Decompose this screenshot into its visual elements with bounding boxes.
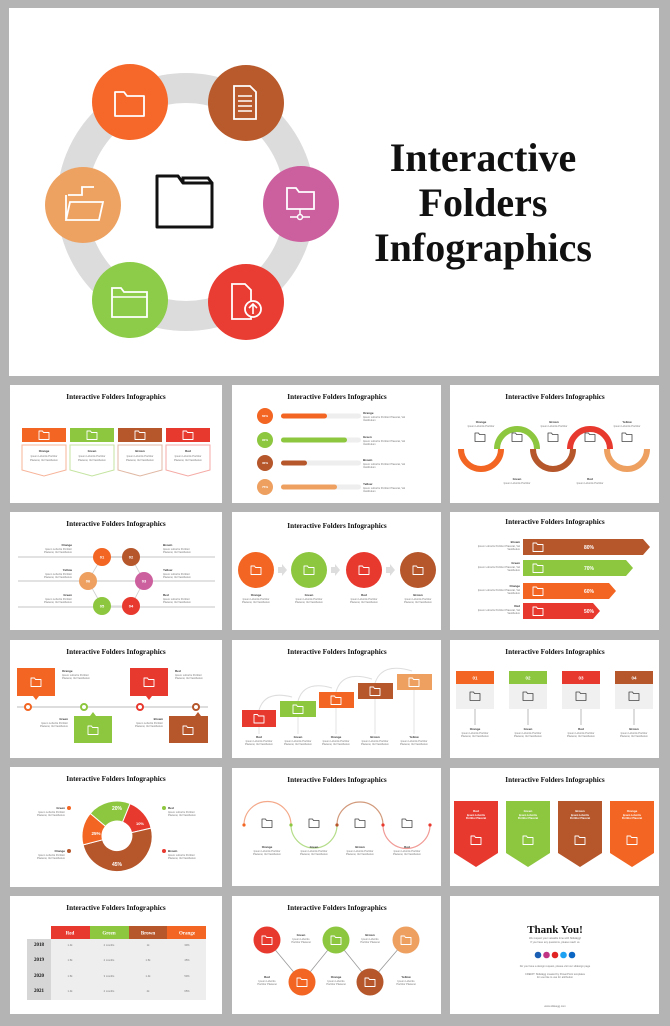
panel: slide 6 arrow bars: 50%: [584, 609, 595, 615]
panel: slide 9 numbered cards: Ipsum Lobortis Porttitor: [568, 731, 595, 735]
panel: slide 5 process circles: Ipsum Lobortis Porttitor: [243, 597, 270, 601]
panel: slide 5 process circles: Ipsum Lobortis Porttitor: [405, 597, 432, 601]
panel: slide 1 tabs: Interactive Folders Infographics: [66, 393, 166, 401]
panel: slide 1 tabs: Brown: [135, 449, 145, 453]
panel: slide 11 wavy line: Orange: [262, 845, 273, 849]
panel: slide 7 timeline callouts: Ipsum Lobortis Porttitor: [62, 673, 89, 677]
panel: slide 2 progress bars: 75%: [262, 485, 268, 489]
panel: slide 9 numbered cards: Brown: [629, 727, 639, 731]
panel: slide 7 timeline callouts: Placerat, Vel Vestibulum: [135, 724, 163, 728]
panel: slide 13 table: 65%: [184, 989, 190, 993]
panel: slide 13 table: 1.4k: [146, 974, 151, 978]
panel: slide 8 staircase: [232, 640, 441, 758]
panel: slide 3 wave: Green: [513, 477, 522, 481]
panel: slide 10 donut chart: Ipsum Lobortis Porttitor: [168, 853, 195, 857]
icon: brown document circle: [208, 65, 284, 141]
panel: slide 10 donut chart: Ipsum Lobortis Porttitor: [168, 810, 195, 814]
panel: slide 1 tabs: Placerat, Vel Vestibulum: [126, 458, 154, 462]
panel: slide 14 zigzag circles: [232, 896, 441, 1014]
panel: slide 14 zigzag circles: Brown: [365, 933, 375, 937]
panel: slide 8 staircase: Ipsum Lobortis Porttitor: [246, 739, 273, 743]
panel: slide 5 process circles: Placerat, Vel Vestibulum: [404, 600, 432, 604]
panel: slide 11 wavy line: Interactive Folders Infographics: [287, 776, 387, 784]
panel: slide 15 thank you: Thank You!: [527, 924, 583, 936]
panel: slide 12 banners: Porttitor Placerat: [622, 817, 642, 820]
panel: slide 12 banners: Orange: [627, 809, 638, 813]
panel: slide 4 hexagon: Green: [63, 593, 72, 597]
panel: slide 8 staircase: Placerat, Vel Vestibulum: [361, 742, 389, 746]
panel: slide 13 table: 50%: [184, 974, 190, 978]
panel: slide 1 tabs: Ipsum Lobortis Porttitor: [175, 454, 202, 458]
panel: slide 4 hexagon: Yellow: [63, 568, 73, 572]
panel: slide 14 zigzag circles: Ipsum Lobortis: [361, 937, 379, 941]
panel: slide 14 zigzag circles: Interactive Folders Infographics: [287, 904, 387, 912]
panel: slide 4 hexagon: Placerat, Vel Vestibulum: [163, 575, 191, 579]
panel: slide 1 tabs: Placerat, Vel Vestibulum: [78, 458, 106, 462]
panel: slide 10 donut chart: 25%: [91, 831, 101, 836]
panel: slide 15 thank you: If you have any questions, please reach us: [530, 940, 580, 944]
panel: slide 2 progress bars: Brown: [363, 458, 372, 462]
panel: slide 4 hexagon: Ipsum Lobortis Porttitor: [45, 597, 72, 601]
icon: pink shared folder circle: [263, 166, 339, 242]
panel: slide 6 arrow bars: 70%: [584, 566, 595, 572]
panel: slide 4 hexagon: Interactive Folders Infographics: [66, 520, 166, 528]
panel: slide 15 thank you: www.slideegg.com: [544, 1004, 566, 1008]
panel: slide 5 process circles: Interactive Folders Infographics: [287, 522, 387, 530]
panel: slide 15 thank you: [450, 896, 659, 1014]
panel: slide 4 hexagon: [10, 512, 222, 630]
panel: slide 4 hexagon: Placerat, Vel Vestibulum: [44, 575, 72, 579]
panel: slide 11 wavy line: Red: [404, 845, 410, 849]
panel: slide 12 banners: Red: [473, 809, 479, 813]
panel: slide 9 numbered cards: 03: [578, 676, 584, 680]
panel: slide 11 wavy line: Green: [310, 845, 319, 849]
panel: slide 7 timeline callouts: Ipsum Lobortis Porttitor: [175, 673, 202, 677]
panel: slide 12 banners: Porttitor Placerat: [466, 817, 486, 820]
panel: slide 14 zigzag circles: Porttitor Placerat: [257, 982, 277, 986]
panel: slide 13 table: 45%: [184, 958, 190, 962]
panel: slide 9 numbered cards: Interactive Folders Infographics: [505, 648, 605, 656]
panel: slide 10 donut chart: Green: [56, 806, 65, 810]
panel: slide 14 zigzag circles: Ipsum Lobortis: [258, 979, 276, 983]
panel: slide 13 table: 1.5k: [68, 974, 73, 978]
panel: slide 12 banners: Porttitor Placerat: [570, 817, 590, 820]
panel: slide 2 progress bars: Vestibulum: [363, 442, 376, 446]
panel: slide 5 process circles: Ipsum Lobortis Porttitor: [351, 597, 378, 601]
panel: slide 13 table: 2k: [147, 989, 150, 993]
panel: slide 13 table: 2018: [34, 943, 44, 948]
panel: slide 6 arrow bars: Red: [514, 604, 520, 608]
panel: slide 4 hexagon: 06: [86, 578, 91, 584]
panel: slide 12 banners: Brown: [575, 809, 585, 813]
panel: slide 12 banners: Porttitor Placerat: [518, 817, 538, 820]
panel: slide 10 donut chart: Placerat, Vel Vestibulum: [168, 856, 196, 860]
panel: slide 10 donut chart: Placerat, Vel Vestibulum: [37, 856, 65, 860]
panel: slide 7 timeline callouts: Brown: [154, 717, 163, 721]
panel: slide 9 numbered cards: Placerat, Vel Vestibulum: [514, 734, 542, 738]
panel: slide 14 zigzag circles: Porttitor Placerat: [291, 940, 311, 944]
panel: slide 9 numbered cards: Placerat, Vel Vestibulum: [620, 734, 648, 738]
panel: slide 10 donut chart: Brown: [168, 849, 178, 853]
title: Infographics: [374, 225, 592, 270]
panel: slide 4 hexagon: Red: [163, 593, 169, 597]
panel: slide 11 wavy line: [232, 768, 441, 886]
panel: slide 9 numbered cards: Ipsum Lobortis Porttitor: [462, 731, 489, 735]
panel: slide 2 progress bars: 90%: [262, 438, 268, 442]
panel: slide 6 arrow bars: Vestibulum: [507, 611, 520, 615]
panel: slide 14 zigzag circles: Ipsum Lobortis: [397, 979, 415, 983]
panel: slide 11 wavy line: Ipsum Lobortis Porttitor: [394, 849, 421, 853]
panel: slide 5 process circles: Orange: [251, 593, 262, 597]
panel: slide 6 arrow bars: Green: [511, 561, 520, 565]
panel: slide 5 process circles: [232, 512, 441, 630]
panel: slide 4 hexagon: 04: [129, 604, 134, 608]
panel: slide 14 zigzag circles: Yellow: [401, 975, 411, 979]
panel: slide 8 staircase: Placerat, Vel Vestibulum: [245, 742, 273, 746]
panel: slide 3 wave: Interactive Folders Infographics: [505, 393, 605, 401]
panel: slide 8 staircase: Yellow: [409, 735, 419, 739]
panel: slide 10 donut chart: Placerat, Vel Vestibulum: [168, 813, 196, 817]
icon: light orange files folder circle: [45, 167, 121, 243]
panel: slide 4 hexagon: 01: [100, 554, 105, 560]
panel: slide 8 staircase: Ipsum Lobortis Porttitor: [285, 739, 312, 743]
panel: slide 3 wave: Ipsum Lobortis Porttitor: [468, 424, 495, 428]
panel: slide 9 numbered cards: Placerat, Vel Vestibulum: [461, 734, 489, 738]
panel: slide 8 staircase: Placerat, Vel Vestibulum: [400, 742, 428, 746]
panel: slide 12 banners: Ipsum Lobortis: [623, 814, 642, 817]
panel: slide 10 donut chart: 45%: [112, 862, 123, 868]
panel: slide 8 staircase: Placerat, Vel Vestibulum: [322, 742, 350, 746]
panel: slide 4 hexagon: Placerat, Vel Vestibulum: [163, 550, 191, 554]
panel: slide 3 wave: Orange: [476, 420, 487, 424]
panel: slide 7 timeline callouts: Placerat, Vel Vestibulum: [175, 676, 203, 680]
panel: slide 10 donut chart: 20%: [112, 806, 123, 812]
panel: slide 11 wavy line: Placerat, Vel Vestibulum: [346, 852, 374, 856]
panel: slide 1 tabs: Placerat, Vel Vestibulum: [174, 458, 202, 462]
panel: slide 6 arrow bars: [450, 512, 659, 630]
panel: slide 10 donut chart: Red: [168, 806, 174, 810]
title: Interactive: [390, 135, 576, 180]
panel: slide 14 zigzag circles: Porttitor Placerat: [326, 982, 346, 986]
panel: slide 2 progress bars: Vestibulum: [363, 465, 376, 469]
panel: slide 15 thank you: We respect your valuable time with SlideEgg!: [529, 936, 581, 940]
panel: slide 5 process circles: Placerat, Vel Vestibulum: [242, 600, 270, 604]
panel: slide 8 staircase: Brown: [370, 735, 380, 739]
panel: slide 2 progress bars: Yellow: [363, 482, 373, 486]
panel: slide 6 arrow bars: Ipsum Lobortis Porttitor Placerat, Vel: [478, 608, 520, 612]
panel: slide 2 progress bars: [232, 385, 441, 503]
panel: slide 5 process circles: Placerat, Vel Vestibulum: [295, 600, 323, 604]
panel: slide 1 tabs: Red: [185, 449, 191, 453]
panel: slide 11 wavy line: Ipsum Lobortis Porttitor: [254, 849, 281, 853]
panel: slide 7 timeline callouts: Orange: [62, 669, 73, 673]
panel: slide 13 table: 1.5k: [68, 958, 73, 962]
panel: slide 13 table: 1k: [147, 943, 150, 947]
panel: slide 14 zigzag circles: Porttitor Placerat: [360, 940, 380, 944]
panel: slide 6 arrow bars: Vestibulum: [507, 547, 520, 551]
icon: red upload file circle: [208, 264, 284, 340]
panel: slide 1 tabs: Green: [88, 449, 97, 453]
panel: slide 8 staircase: Interactive Folders Infographics: [287, 648, 387, 656]
panel: slide 3 wave: Red: [587, 477, 593, 481]
panel: slide 11 wavy line: Placerat, Vel Vestibulum: [300, 852, 328, 856]
panel: slide 6 arrow bars: Orange: [509, 584, 520, 588]
panel: slide 10 donut chart: Ipsum Lobortis Porttitor: [38, 853, 65, 857]
panel: slide 6 arrow bars: Vestibulum: [507, 591, 520, 595]
panel: slide 14 zigzag circles: Green: [297, 933, 306, 937]
panel: slide 13 table: 2 months: [104, 958, 115, 962]
panel: slide 2 progress bars: Ipsum Lobortis Porttitor Placerat, Vel: [363, 462, 406, 466]
panel: slide 7 timeline callouts: Placerat, Vel Vestibulum: [62, 676, 90, 680]
panel: slide 6 arrow bars: Ipsum Lobortis Porttitor Placerat, Vel: [478, 565, 520, 569]
panel: slide 8 staircase: Ipsum Lobortis Porttitor: [323, 739, 350, 743]
panel: slide 4 hexagon: Ipsum Lobortis Porttitor: [163, 547, 190, 551]
panel: slide 10 donut chart: Placerat, Vel Vestibulum: [37, 813, 65, 817]
panel: slide 4 hexagon: Orange: [61, 543, 72, 547]
icon: center folder: [157, 176, 212, 227]
panel: slide 12 banners: Ipsum Lobortis: [519, 814, 538, 817]
panel: slide 4 hexagon: Ipsum Lobortis Porttitor: [45, 547, 72, 551]
panel: slide 3 wave: Ipsum Lobortis Porttitor: [541, 424, 568, 428]
panel: slide 13 table: 1.5k: [146, 958, 151, 962]
panel: slide 14 zigzag circles: Porttitor Placerat: [396, 982, 416, 986]
panel: slide 13 table: 2 months: [104, 989, 115, 993]
panel: slide 13 table: 2 months: [104, 943, 115, 947]
panel: slide 12 banners: Green: [524, 809, 533, 813]
panel: slide 11 wavy line: Placerat, Vel Vestibulum: [393, 852, 421, 856]
panel: slide 12 banners: Ipsum Lobortis: [467, 814, 486, 817]
panel: slide 7 timeline callouts: [10, 640, 222, 758]
panel: slide 13 table: Orange: [179, 932, 196, 936]
panel: slide 1 tabs: Orange: [39, 449, 50, 453]
panel: slide 6 arrow bars: Ipsum Lobortis Porttitor Placerat, Vel: [478, 544, 520, 548]
icon: orange folder circle: [92, 64, 168, 140]
panel: slide 3 wave: Ipsum Lobortis Porttitor: [577, 481, 604, 485]
panel: slide 2 progress bars: Vestibulum: [363, 489, 376, 493]
panel: slide 14 zigzag circles: Ipsum Lobortis: [292, 937, 310, 941]
panel: slide 13 table: Interactive Folders Infographics: [66, 904, 166, 912]
panel: slide 15 thank you: CREDIT: SlideEgg created by PowerPoint templates: [525, 972, 586, 976]
panel: slide 4 hexagon: Yellow: [163, 568, 173, 572]
panel: slide 3 wave: Ipsum Lobortis Porttitor: [614, 424, 641, 428]
panel: slide 9 numbered cards: Placerat, Vel Vestibulum: [567, 734, 595, 738]
panel: slide 11 wavy line: Ipsum Lobortis Porttitor: [347, 849, 374, 853]
panel: slide 13 table: 1.4k: [68, 943, 73, 947]
panel: slide 9 numbered cards: Green: [524, 727, 533, 731]
panel: slide 9 numbered cards: 02: [525, 676, 531, 680]
panel: slide 7 timeline callouts: Ipsum Lobortis Porttitor: [136, 721, 163, 725]
panel: slide 8 staircase: Ipsum Lobortis Porttitor: [401, 739, 428, 743]
panel: slide 2 progress bars: 30%: [262, 461, 268, 465]
panel: slide 3 wave: Brown: [549, 420, 559, 424]
panel: slide 7 timeline callouts: Ipsum Lobortis Porttitor: [41, 721, 68, 725]
panel: slide 9 numbered cards: Orange: [470, 727, 481, 731]
panel: slide 10 donut chart: Ipsum Lobortis Porttitor: [38, 810, 65, 814]
panel: slide 6 arrow bars: Ipsum Lobortis Porttitor Placerat, Vel: [478, 588, 520, 592]
panel: slide 10 donut chart: Orange: [54, 849, 65, 853]
panel: slide 9 numbered cards: 04: [631, 676, 637, 680]
panel: slide 4 hexagon: Ipsum Lobortis Porttitor: [163, 597, 190, 601]
panel: slide 6 arrow bars: Brown: [511, 540, 520, 544]
panel: slide 9 numbered cards: Ipsum Lobortis Porttitor: [621, 731, 648, 735]
title: Folders: [419, 180, 547, 225]
panel: slide 5 process circles: Ipsum Lobortis Porttitor: [296, 597, 323, 601]
panel: slide 1 tabs: Ipsum Lobortis Porttitor: [31, 454, 58, 458]
panel: slide 14 zigzag circles: Red: [264, 975, 270, 979]
panel: slide 5 process circles: Placerat, Vel Vestibulum: [350, 600, 378, 604]
panel: slide 5 process circles: Brown: [413, 593, 423, 597]
panel: slide 9 numbered cards: 01: [472, 676, 478, 680]
panel: slide 8 staircase: Placerat, Vel Vestibulum: [284, 742, 312, 746]
panel: slide 12 banners: Interactive Folders Infographics: [505, 776, 605, 784]
panel: slide 13 table: 2021: [34, 989, 44, 994]
panel: slide 11 wavy line: Ipsum Lobortis Porttitor: [301, 849, 328, 853]
panel: slide 15 thank you: Do you have a design request, please visit our slidesign page: [520, 964, 591, 968]
panel: slide 3 wave: Ipsum Lobortis Porttitor: [504, 481, 531, 485]
panel: slide 8 staircase: Orange: [331, 735, 342, 739]
panel: slide 1 tabs: Placerat, Vel Vestibulum: [30, 458, 58, 462]
panel: slide 3 wave: Yellow: [622, 420, 632, 424]
panel: slide 11 wavy line: Brown: [355, 845, 365, 849]
panel: slide 7 timeline callouts: Green: [59, 717, 68, 721]
panel: slide 13 table: Green: [102, 932, 116, 936]
panel: slide 13 table: Red: [66, 932, 75, 936]
panel: slide 10 donut chart: Interactive Folders Infographics: [66, 775, 166, 783]
panel: slide 1 tabs: Ipsum Lobortis Porttitor: [79, 454, 106, 458]
panel: slide 2 progress bars: Orange: [363, 411, 374, 415]
panel: slide 9 numbered cards: [450, 640, 659, 758]
panel: slide 10 donut chart: [10, 767, 222, 887]
icon: green open folder circle: [92, 262, 168, 338]
panel: slide 13 table: 3 months: [104, 974, 115, 978]
panel: slide 5 process circles: Red: [361, 593, 367, 597]
panel: slide 4 hexagon: Ipsum Lobortis Porttitor: [45, 572, 72, 576]
panel: slide 8 staircase: Red: [256, 735, 262, 739]
panel: slide 9 numbered cards: Red: [578, 727, 584, 731]
panel: slide 2 progress bars: Ipsum Lobortis Porttitor Placerat, Vel: [363, 439, 406, 443]
panel: slide 5 process circles: Green: [305, 593, 314, 597]
panel: slide 4 hexagon: 05: [100, 604, 105, 608]
panel: slide 2 progress bars: 60%: [262, 414, 268, 418]
panel: slide 8 staircase: Ipsum Lobortis Porttitor: [362, 739, 389, 743]
panel: slide 14 zigzag circles: Orange: [331, 975, 342, 979]
panel: slide 1 tabs: Ipsum Lobortis Porttitor: [127, 454, 154, 458]
panel: slide 2 progress bars: Ipsum Lobortis Porttitor Placerat, Vel: [363, 486, 406, 490]
ring: [72, 88, 300, 316]
panel: slide 3 wave: [450, 385, 659, 503]
panel: slide 10 donut chart: 10%: [136, 821, 144, 826]
panel: slide 13 table: [10, 896, 222, 1014]
panel: slide 4 hexagon: Brown: [163, 543, 172, 547]
panel: slide 2 progress bars: Vestibulum: [363, 418, 376, 422]
panel: slide 2 progress bars: Green: [363, 435, 372, 439]
panel: slide 13 table: Brown: [141, 932, 155, 936]
panel: slide 15 thank you: for use like to use for attribution: [537, 975, 574, 979]
panel: slide 4 hexagon: Placerat, Vel Vestibulum: [44, 600, 72, 604]
panel: slide 13 table: 30%: [184, 943, 190, 947]
panel: slide 4 hexagon: 02: [129, 554, 134, 560]
panel: slide 12 banners: [450, 768, 659, 886]
panel: slide 12 banners: Ipsum Lobortis: [571, 814, 590, 817]
panel: slide 14 zigzag circles: Ipsum Lobortis: [327, 979, 345, 983]
panel: hero slide: [9, 8, 659, 376]
panel: slide 6 arrow bars: Interactive Folders Infographics: [505, 518, 605, 526]
panel: slide 2 progress bars: Ipsum Lobortis Porttitor Placerat, Vel: [363, 415, 406, 419]
panel: slide 4 hexagon: Ipsum Lobortis Porttitor: [163, 572, 190, 576]
panel: slide 6 arrow bars: 80%: [584, 545, 595, 551]
panel: slide 13 table: 2019: [34, 958, 44, 963]
panel: slide 13 table: 2020: [34, 974, 44, 979]
panel: slide 4 hexagon: Placerat, Vel Vestibulum: [44, 550, 72, 554]
panel: slide 9 numbered cards: Ipsum Lobortis Porttitor: [515, 731, 542, 735]
panel: slide 7 timeline callouts: Red: [175, 669, 181, 673]
panel: slide 8 staircase: Green: [294, 735, 303, 739]
panel: slide 4 hexagon: Placerat, Vel Vestibulum: [163, 600, 191, 604]
panel: slide 1 tabs: [10, 385, 222, 503]
panel: slide 6 arrow bars: 60%: [584, 589, 595, 595]
panel: slide 13 table: 1.4k: [68, 989, 73, 993]
panel: slide 7 timeline callouts: Interactive Folders Infographics: [66, 648, 166, 656]
panel: slide 4 hexagon: 03: [142, 578, 147, 584]
panel: slide 6 arrow bars: Vestibulum: [507, 568, 520, 572]
panel: slide 7 timeline callouts: Placerat, Vel Vestibulum: [40, 724, 68, 728]
panel: slide 11 wavy line: Placerat, Vel Vestibulum: [253, 852, 281, 856]
panel: slide 2 progress bars: Interactive Folders Infographics: [287, 393, 387, 401]
